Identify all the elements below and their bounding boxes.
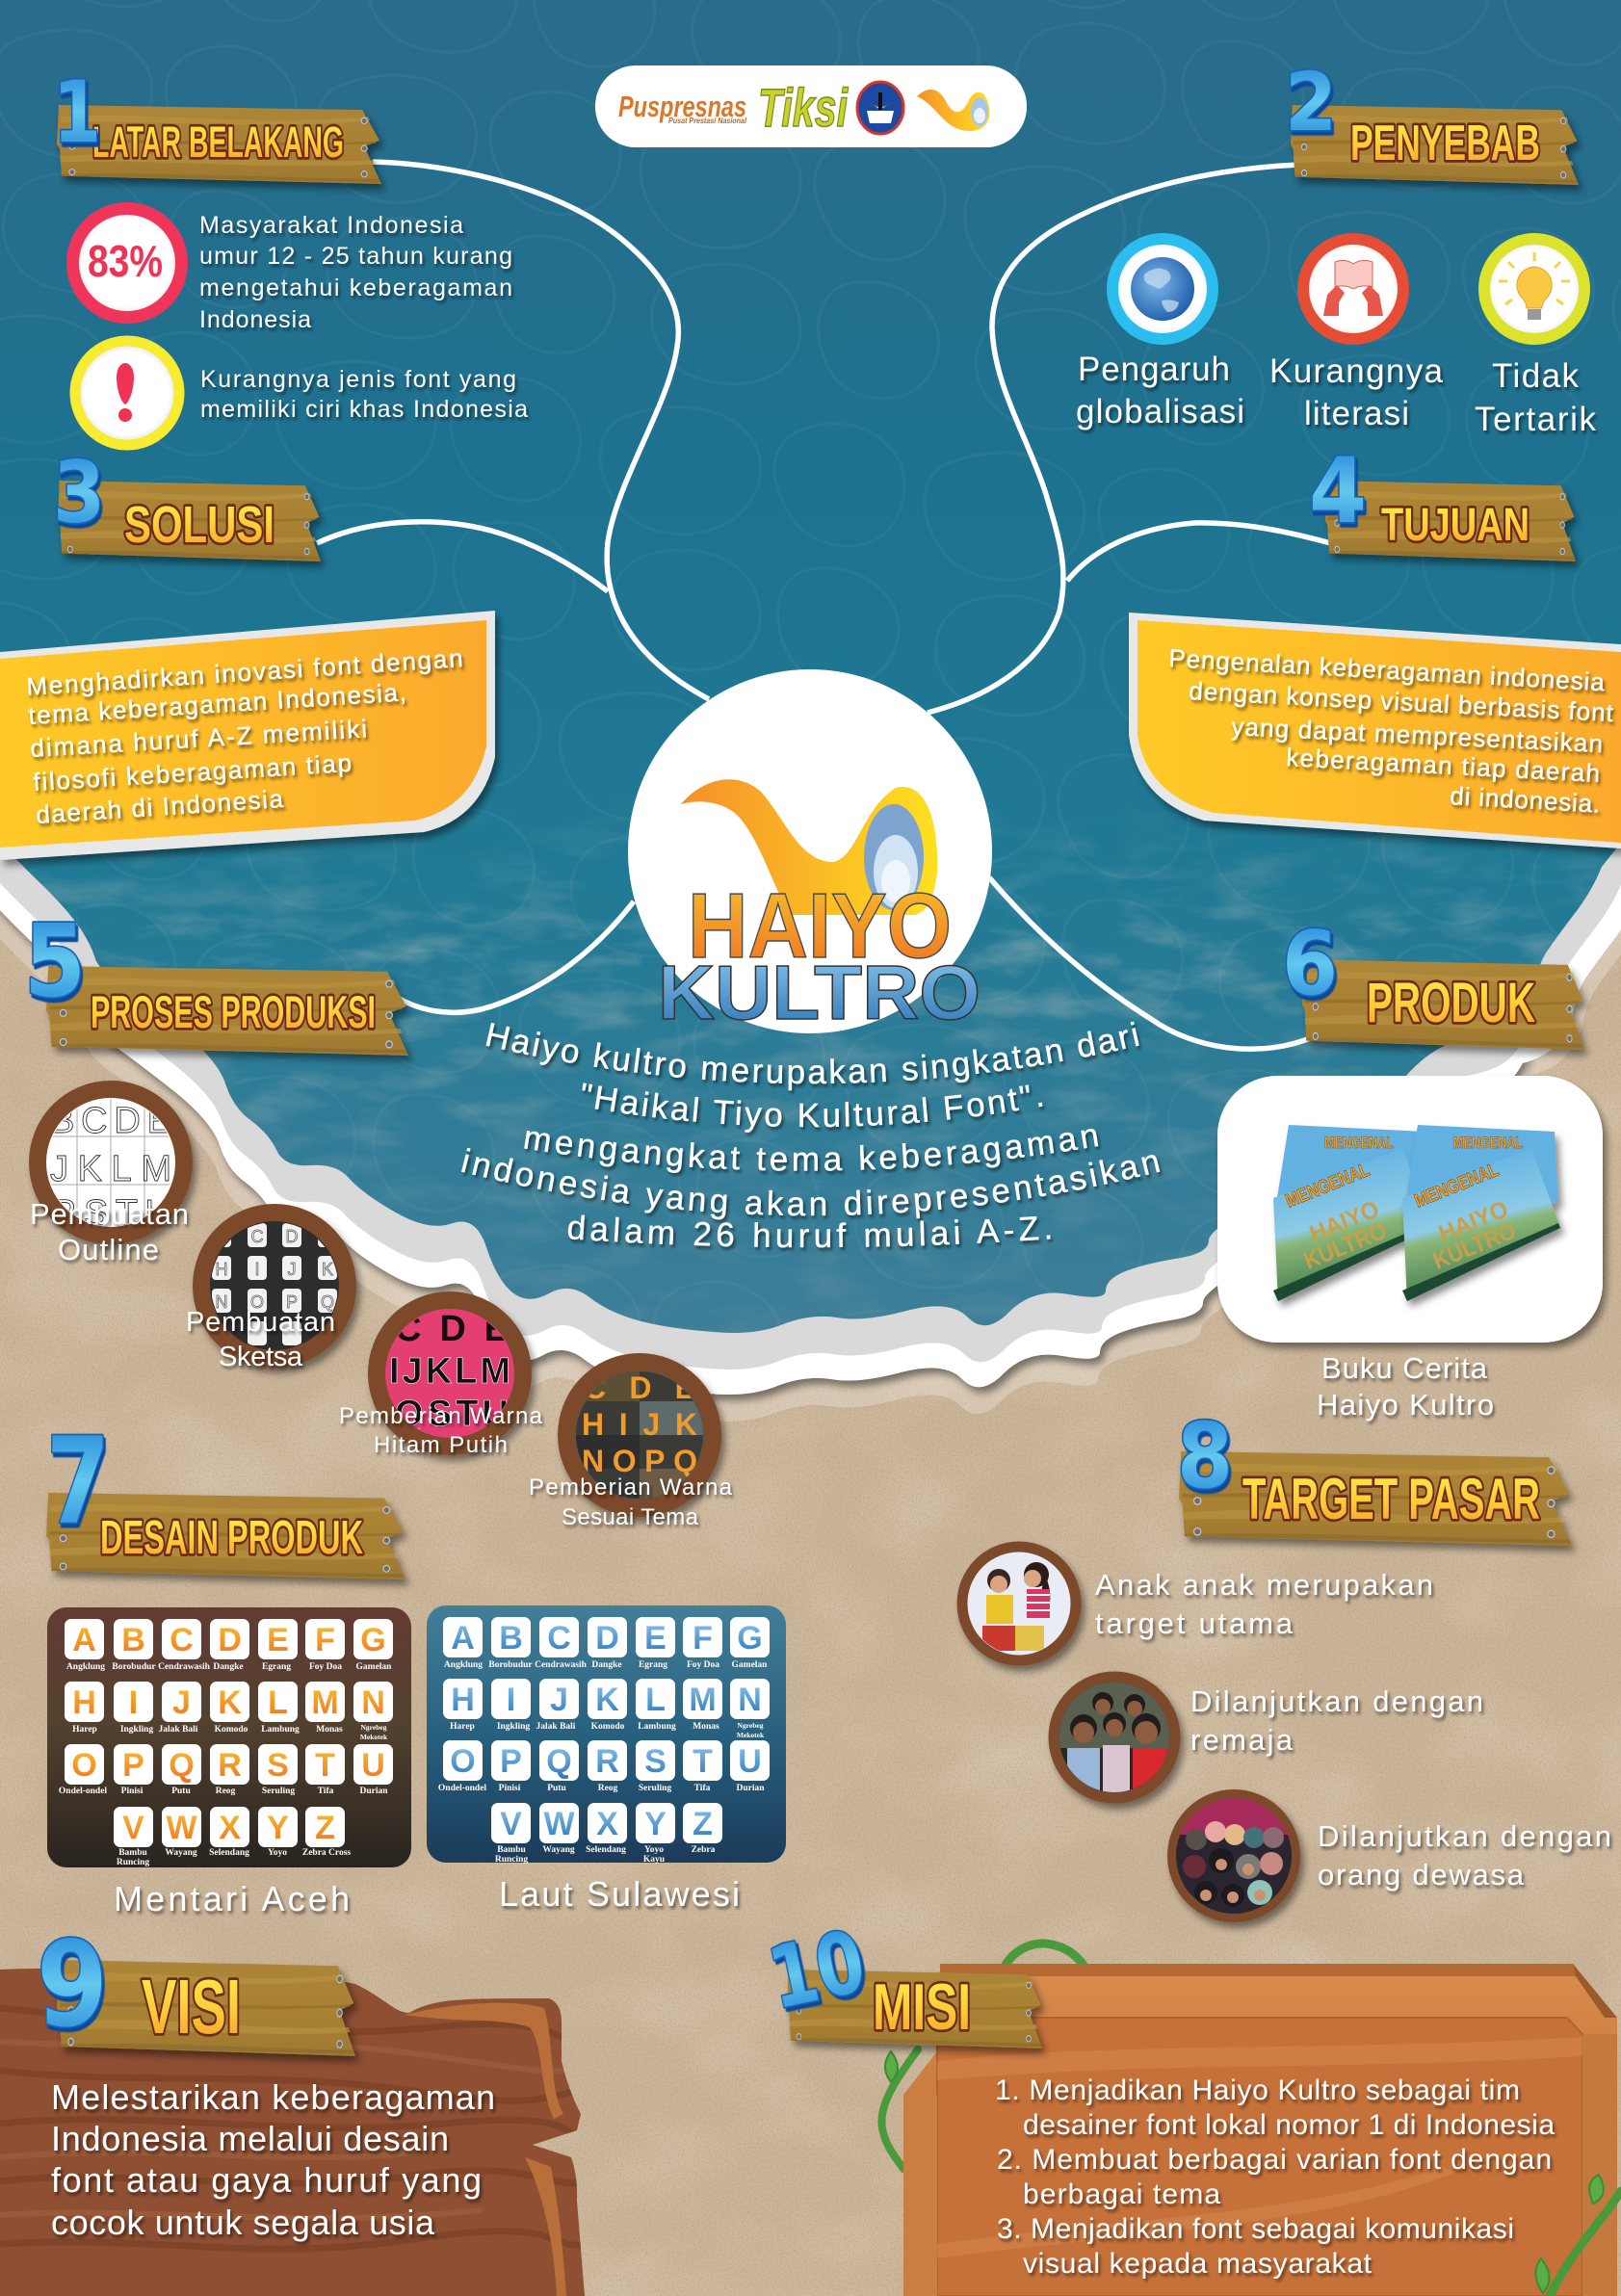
label bbox=[1095, 1568, 1433, 1640]
text: solusi: Menghadirkan inovasi font dengan bbox=[25, 643, 463, 701]
label bbox=[529, 1474, 733, 1530]
tiles: M bbox=[689, 1682, 717, 1718]
image: story book 1: MENGENAL bbox=[1283, 1160, 1373, 1213]
tiles: E bbox=[267, 1622, 289, 1658]
text: statistic: umur 12 - 25 tahun kurang bbox=[199, 243, 512, 270]
tile captions: Ngrebeg bbox=[738, 1721, 764, 1730]
image: story book 2: HAIYO bbox=[1435, 1196, 1512, 1248]
shoreline foam bands bbox=[0, 848, 1621, 1422]
text: font shortage bbox=[200, 366, 528, 423]
tiles: Q bbox=[169, 1747, 195, 1784]
tiles: N bbox=[361, 1684, 385, 1721]
image: sketch tiles: I bbox=[254, 1260, 260, 1279]
text: product caption: Buku Cerita bbox=[1321, 1351, 1488, 1385]
tile captions: Lambung bbox=[261, 1725, 300, 1735]
text: tujuan: dengan konsep visual berbasis font bbox=[1189, 676, 1614, 727]
panel: visi wooden board bbox=[0, 1968, 597, 2296]
image: photo letters: NOPQ bbox=[582, 1444, 697, 1478]
section 7: desain produk heading bbox=[46, 1413, 405, 1579]
section 10: misi heading: MISI bbox=[873, 1970, 971, 2044]
section 3: solusi heading: SOLUSI bbox=[124, 496, 275, 554]
section 6: produk heading bbox=[1282, 912, 1584, 1050]
logo: HAIYO wordmark: HAIYO bbox=[688, 874, 952, 978]
tiles: Z bbox=[693, 1806, 713, 1842]
logo: Puspresnas: Puspresnas bbox=[618, 90, 746, 123]
text: cause labels: Kurangnya bbox=[1269, 352, 1444, 390]
label bbox=[1190, 1684, 1483, 1757]
text: curved introduction paragraph bbox=[461, 1021, 1163, 1252]
text: curved introduction paragraph: indonesia yang akan direpresentasikan bbox=[461, 1148, 1163, 1225]
section 6: produk heading: 6 bbox=[1282, 912, 1338, 1015]
text: visi: font atau gaya huruf yang bbox=[51, 2160, 482, 2200]
tiles: R bbox=[595, 1743, 619, 1780]
icon: light bulb bbox=[1484, 239, 1584, 339]
text: cause labels: Tidak bbox=[1492, 357, 1580, 395]
image: outline letters bbox=[50, 1099, 170, 1226]
text: visi bbox=[51, 2077, 495, 2242]
image: photo letters: CDE bbox=[584, 1370, 695, 1405]
logo: KULTRO wordmark: KULTRO bbox=[658, 950, 980, 1035]
tile captions: Dangke bbox=[213, 1662, 244, 1672]
section 2: penyebab heading: PENYEBAB bbox=[1350, 116, 1540, 171]
text: solusi bbox=[25, 643, 463, 829]
tiles: R bbox=[218, 1747, 242, 1784]
tile captions: Ondel-ondel bbox=[438, 1784, 486, 1793]
tiles: S bbox=[267, 1747, 289, 1784]
tile captions: Tifa bbox=[318, 1787, 334, 1796]
text: curved introduction paragraph: "Haikal Tiyo Kultural Font". bbox=[582, 1083, 1046, 1137]
text: tujuan bbox=[1168, 643, 1614, 819]
image: black and white letters: QSTU bbox=[395, 1394, 509, 1434]
tile captions: Jalak Bali bbox=[536, 1722, 576, 1732]
text: visi: cocok untuk segala usia bbox=[51, 2203, 435, 2242]
text: misi list: 2. Membuat berbagai varian font dengan bbox=[997, 2144, 1552, 2176]
connector lines bbox=[317, 162, 1341, 1049]
tile captions: Yoyo bbox=[268, 1848, 287, 1858]
logo bar bbox=[595, 65, 1027, 147]
text: solusi: filosofi keberagaman tiap bbox=[33, 748, 353, 796]
image: story book 2 bbox=[1402, 1125, 1560, 1301]
label: Dilanjutkan dengan bbox=[1318, 1819, 1611, 1853]
tiles: H bbox=[72, 1684, 96, 1721]
tile captions: Putu bbox=[547, 1784, 566, 1793]
tile captions: Durian bbox=[736, 1784, 765, 1793]
tiles: M bbox=[311, 1684, 339, 1721]
image: sketch tiles: O bbox=[250, 1292, 264, 1312]
text: solusi: tema keberagaman Indonesia, bbox=[27, 677, 407, 730]
label: Pemberian Warna bbox=[339, 1403, 543, 1429]
section 4: tujuan heading bbox=[1309, 439, 1576, 561]
tile captions: Egrang bbox=[262, 1662, 291, 1672]
tiles: H bbox=[451, 1682, 475, 1718]
process step 2: sketch bbox=[186, 1213, 348, 1372]
text: alphabet captions: Mentari Aceh bbox=[114, 1879, 350, 1918]
text: statistic: Masyarakat Indonesia bbox=[199, 212, 463, 239]
label: Pemberian Warna bbox=[529, 1474, 733, 1500]
tile captions: Ingkling bbox=[120, 1725, 153, 1735]
section 1: latar belakang heading: LATAR BELAKANG bbox=[92, 117, 344, 167]
label bbox=[186, 1307, 335, 1372]
image: sketch tiles: Q bbox=[321, 1292, 334, 1312]
section 2: penyebab heading bbox=[1285, 55, 1579, 185]
tiles: F bbox=[693, 1620, 713, 1657]
text: statistic: Indonesia bbox=[199, 306, 311, 333]
tiles: T bbox=[315, 1747, 335, 1784]
text: statistic: mengetahui keberagaman bbox=[199, 274, 512, 301]
process step 1: outline bbox=[30, 1089, 189, 1266]
tile captions: Monas bbox=[316, 1725, 343, 1735]
image: story book 2: KULTRO bbox=[1429, 1217, 1520, 1275]
tile captions: Tifa bbox=[694, 1784, 711, 1793]
section 5: proses produksi heading: PROSES PRODUKSI bbox=[91, 986, 376, 1037]
background: water bbox=[0, 0, 1621, 1368]
text: tujuan: keberagaman tiap daerah bbox=[1286, 743, 1601, 788]
tile captions: Selendang bbox=[586, 1845, 626, 1855]
text: alphabet captions bbox=[114, 1874, 740, 1918]
image: sketch tiles: N bbox=[216, 1292, 227, 1312]
label: target utama bbox=[1095, 1606, 1294, 1640]
section 8: target pasar heading: 8 bbox=[1177, 1404, 1233, 1509]
tiles: U bbox=[738, 1743, 762, 1780]
tile captions: Cendrawasih bbox=[535, 1660, 588, 1670]
tile captions: Harep bbox=[72, 1725, 97, 1735]
tile captions: Gamelan bbox=[356, 1662, 392, 1672]
tiles: G bbox=[360, 1622, 386, 1658]
tiles: O bbox=[71, 1747, 97, 1784]
tile captions: Mekotek bbox=[360, 1733, 388, 1741]
text: product caption bbox=[1317, 1351, 1494, 1422]
image: story book 1: HAIYO bbox=[1306, 1196, 1383, 1248]
section 8: target pasar heading bbox=[1177, 1404, 1572, 1546]
image: story book 1: MENGENAL bbox=[1324, 1134, 1394, 1152]
section 4: tujuan heading: TUJUAN bbox=[1381, 500, 1529, 551]
image: outline letters: JKLM bbox=[50, 1149, 171, 1189]
tile captions: Ingkling bbox=[497, 1722, 530, 1732]
image: sketch tiles: K bbox=[322, 1260, 333, 1279]
tiles: G bbox=[737, 1620, 763, 1657]
tile captions: Zebra Cross bbox=[302, 1848, 351, 1858]
target audience 1: children bbox=[962, 1547, 1433, 1660]
tiles: X bbox=[219, 1810, 241, 1846]
tiles: F bbox=[315, 1622, 335, 1658]
tiles: P bbox=[122, 1747, 144, 1784]
image: story book 1: KULTRO bbox=[1300, 1217, 1391, 1275]
tile captions: Mekotek bbox=[737, 1731, 765, 1739]
tiles: J bbox=[550, 1682, 568, 1718]
label: Hitam Putih bbox=[374, 1432, 508, 1458]
tiles: K bbox=[595, 1682, 619, 1718]
tiles: X bbox=[596, 1806, 618, 1842]
logo: centre circle bbox=[628, 669, 992, 1035]
text: solusi: dimana huruf A-Z memiliki bbox=[30, 714, 368, 763]
tile captions: Seruling bbox=[639, 1784, 671, 1793]
tile captions: Runcing bbox=[495, 1855, 528, 1865]
tile captions: Kayu bbox=[643, 1855, 666, 1865]
text: misi list: visual kepada masyarakat bbox=[1023, 2248, 1373, 2280]
tile captions bbox=[59, 1662, 392, 1867]
label: Outline bbox=[58, 1233, 159, 1266]
section 7: desain produk heading: 7 bbox=[46, 1413, 110, 1552]
tiles: P bbox=[500, 1743, 522, 1780]
tile captions: Angklung bbox=[444, 1660, 483, 1670]
text: tujuan: di indonesia. bbox=[1450, 781, 1601, 819]
image: story book 2: MENGENAL bbox=[1453, 1134, 1523, 1152]
text: font shortage: memiliki ciri khas Indonesia bbox=[200, 396, 528, 423]
tile captions: Seruling bbox=[262, 1787, 295, 1796]
tiles: S bbox=[644, 1743, 667, 1780]
panel: Laut Sulawesi alphabet bbox=[427, 1605, 786, 1865]
label bbox=[1318, 1819, 1611, 1892]
image: sketch tiles: J bbox=[287, 1260, 297, 1279]
tiles: E bbox=[644, 1620, 667, 1657]
tiles bbox=[65, 1619, 393, 1847]
icon: green vines behind board bbox=[881, 1944, 1085, 2169]
tile captions: Foy Doa bbox=[687, 1660, 719, 1670]
section 3: solusi heading bbox=[53, 443, 321, 561]
text: misi list: berbagai tema bbox=[1023, 2179, 1220, 2210]
text: solusi: daerah di Indonesia bbox=[35, 784, 284, 829]
tile captions: Borobudur bbox=[112, 1662, 156, 1672]
label: remaja bbox=[1190, 1723, 1294, 1757]
label: Pembuatan bbox=[186, 1307, 335, 1338]
tiles: L bbox=[268, 1684, 288, 1721]
tile captions: Yoyo bbox=[644, 1845, 664, 1855]
image: black and white letters bbox=[391, 1316, 509, 1429]
tile captions: Lambung bbox=[638, 1722, 676, 1732]
section 9: visi heading: 9 bbox=[37, 1917, 108, 2053]
tile captions: Bambu bbox=[118, 1848, 147, 1858]
text: visi: Indonesia melalui desain bbox=[51, 2119, 449, 2158]
text: curved introduction paragraph: dalam 26 huruf mulai A-Z. bbox=[568, 1215, 1054, 1252]
text: cause labels bbox=[1076, 351, 1597, 438]
text: cause labels: globalisasi bbox=[1076, 393, 1244, 430]
tile captions: Komodo bbox=[215, 1725, 248, 1735]
tile captions: Jalak Bali bbox=[159, 1725, 198, 1735]
tiles: Z bbox=[315, 1810, 335, 1846]
image: teenagers photo bbox=[1059, 1683, 1169, 1793]
icon: exclamation bbox=[75, 341, 179, 445]
tiles: Y bbox=[267, 1810, 289, 1846]
label: Anak anak merupakan bbox=[1095, 1568, 1433, 1602]
tiles bbox=[443, 1617, 770, 1843]
image: sketch tiles: C bbox=[250, 1227, 264, 1246]
icon: green vine front bbox=[1535, 2175, 1621, 2296]
logo: horn bbox=[681, 779, 937, 915]
tiles: A bbox=[451, 1620, 475, 1657]
tile captions: Putu bbox=[171, 1787, 191, 1796]
image: black and white letters: IJKLM bbox=[389, 1351, 510, 1392]
image: photo letters bbox=[576, 1371, 703, 1499]
image: sketch tiles bbox=[212, 1223, 337, 1345]
tile captions: Borobudur bbox=[488, 1660, 533, 1670]
tile captions: Durian bbox=[359, 1787, 388, 1796]
tiles: W bbox=[166, 1810, 197, 1846]
text: cause labels: Tertarik bbox=[1475, 401, 1597, 438]
image: sketch tiles: H bbox=[216, 1260, 227, 1279]
tile captions: Ngrebeg bbox=[361, 1723, 387, 1732]
text: cause labels: literasi bbox=[1304, 395, 1409, 432]
tile captions: Harep bbox=[450, 1722, 475, 1732]
tiles: D bbox=[218, 1622, 242, 1658]
icon: globe bbox=[1112, 239, 1213, 339]
tile captions: Selendang bbox=[209, 1848, 249, 1858]
tiles: A bbox=[72, 1622, 96, 1658]
section 10: misi heading: 10 bbox=[760, 1912, 874, 2028]
tiles: Q bbox=[546, 1743, 572, 1780]
tiles: K bbox=[218, 1684, 242, 1721]
tiles: L bbox=[645, 1682, 666, 1718]
text: statistic bbox=[199, 212, 512, 333]
tiles: I bbox=[507, 1682, 515, 1718]
image: outline letters: RSTU bbox=[50, 1193, 171, 1234]
tiles: V bbox=[500, 1806, 522, 1842]
label bbox=[339, 1403, 543, 1458]
target audience 2: teenagers bbox=[1054, 1677, 1483, 1798]
text: misi list: 3. Menjadikan font sebagai komunikasi bbox=[997, 2213, 1514, 2245]
tile captions: Pinisi bbox=[499, 1784, 521, 1793]
tiles: J bbox=[172, 1684, 191, 1721]
image: outline letters: BCDE bbox=[50, 1101, 171, 1141]
label: Pembuatan bbox=[30, 1197, 189, 1231]
tiles: N bbox=[738, 1682, 762, 1718]
text: misi list: 1. Menjadikan Haiyo Kultro sebagai tim bbox=[995, 2074, 1520, 2106]
tile captions: Zebra bbox=[692, 1845, 716, 1855]
section 7: desain produk heading: DESAIN PRODUK bbox=[100, 1512, 363, 1564]
panel: solusi callout bbox=[0, 611, 495, 860]
text: visi: Melestarikan keberagaman bbox=[51, 2077, 495, 2117]
tile captions: Dangke bbox=[591, 1660, 622, 1670]
image: black and white letters: CDE bbox=[395, 1309, 509, 1349]
logo: emblem bbox=[857, 82, 903, 134]
panel: Mentari Aceh alphabet bbox=[47, 1607, 411, 1867]
logo: Tiksi: Tiksi bbox=[758, 77, 849, 138]
section 6: produk heading: PRODUK bbox=[1367, 972, 1535, 1034]
section 1: latar belakang heading bbox=[53, 63, 381, 184]
logo: Puspresnas: Pusat Prestasi Nasional bbox=[668, 117, 747, 125]
process step 4: themed colouring bbox=[529, 1362, 733, 1530]
tile captions: Wayang bbox=[542, 1845, 575, 1855]
label: Sesuai Tema bbox=[562, 1504, 699, 1530]
section 9: visi heading: VISI bbox=[142, 1964, 241, 2049]
tile captions bbox=[438, 1660, 768, 1865]
tile captions: Egrang bbox=[639, 1660, 667, 1670]
tiles: D bbox=[595, 1620, 619, 1657]
section 9: visi heading bbox=[37, 1917, 355, 2056]
tile captions: Bambu bbox=[497, 1845, 526, 1855]
tiles: B bbox=[121, 1622, 145, 1658]
image: children photo bbox=[982, 1562, 1050, 1651]
tile captions: Pinisi bbox=[121, 1787, 144, 1796]
logo: horn bbox=[917, 90, 989, 131]
image: photo letters: HIJK bbox=[582, 1407, 697, 1442]
text: tujuan: Pengenalan keberagaman indonesia bbox=[1168, 643, 1606, 696]
section 2: penyebab heading: 2 bbox=[1285, 55, 1337, 149]
panel: misi wooden board bbox=[903, 1964, 1617, 2296]
icon: open book bbox=[1303, 239, 1403, 339]
tile captions: Angklung bbox=[66, 1662, 105, 1672]
label bbox=[30, 1197, 189, 1266]
section 5: proses produksi heading bbox=[24, 902, 408, 1056]
text: alphabet captions: Laut Sulawesi bbox=[499, 1874, 740, 1914]
tiles: B bbox=[499, 1620, 523, 1657]
section 1 content bbox=[73, 208, 528, 445]
tile captions: Monas bbox=[693, 1722, 719, 1732]
tiles: C bbox=[547, 1620, 571, 1657]
tile captions: Cendrawasih bbox=[158, 1662, 211, 1672]
tile captions: Foy Doa bbox=[309, 1662, 342, 1672]
text: curved introduction paragraph: Haiyo kultro merupakan singkatan dari bbox=[485, 1021, 1142, 1095]
image: story book 2: MENGENAL bbox=[1412, 1160, 1502, 1213]
text: product caption: Haiyo Kultro bbox=[1317, 1388, 1494, 1422]
tiles: U bbox=[361, 1747, 385, 1784]
target audience 3: adults bbox=[1172, 1794, 1611, 1918]
icon: 83 percent bbox=[73, 208, 181, 318]
section 3: solusi heading: 3 bbox=[53, 443, 105, 542]
tile captions: Gamelan bbox=[732, 1660, 768, 1670]
tiles: W bbox=[543, 1806, 575, 1842]
label: Sketsa bbox=[219, 1342, 303, 1372]
label: Dilanjutkan dengan bbox=[1190, 1684, 1483, 1718]
image: sketch tiles: P bbox=[286, 1292, 298, 1312]
section 5: proses produksi heading: 5 bbox=[24, 902, 86, 1020]
text: misi list bbox=[995, 2074, 1555, 2280]
tile captions: Runcing bbox=[117, 1858, 149, 1867]
text: curved introduction paragraph: mengangkat tema keberagaman bbox=[524, 1129, 1102, 1178]
tiles: Y bbox=[644, 1806, 667, 1842]
tile captions: Reog bbox=[598, 1784, 618, 1793]
image: adults photo bbox=[1176, 1798, 1292, 1914]
text: font shortage: Kurangnya jenis font yang bbox=[200, 366, 516, 393]
tile captions: Ondel-ondel bbox=[59, 1787, 107, 1796]
tiles: T bbox=[693, 1743, 713, 1780]
panel: tujuan callout bbox=[1129, 613, 1621, 848]
text: tujuan: yang dapat mempresentasikan bbox=[1231, 712, 1604, 758]
tile captions: Komodo bbox=[591, 1722, 625, 1732]
icon: 83 percent: 83% bbox=[88, 236, 163, 286]
label: orang dewasa bbox=[1318, 1858, 1525, 1892]
section 1: latar belakang heading: 1 bbox=[53, 63, 101, 162]
tiles: V bbox=[122, 1810, 144, 1846]
panel: product books bbox=[1217, 1076, 1603, 1343]
text: misi list: desainer font lokal nomor 1 di Indonesia bbox=[1023, 2109, 1555, 2141]
tiles: O bbox=[450, 1743, 476, 1780]
section 4: tujuan heading: 4 bbox=[1309, 439, 1367, 544]
process step 3: black white colouring bbox=[339, 1300, 543, 1458]
section 2 content bbox=[1076, 239, 1597, 438]
image: story book 1 bbox=[1273, 1125, 1431, 1301]
tiles: C bbox=[170, 1622, 194, 1658]
image: sketch tiles: D bbox=[285, 1227, 299, 1246]
tile captions: Reog bbox=[216, 1787, 236, 1796]
text: cause labels: Pengaruh bbox=[1078, 351, 1230, 388]
tile captions: Wayang bbox=[165, 1848, 197, 1858]
tiles: I bbox=[129, 1684, 138, 1721]
section 10: misi heading bbox=[760, 1912, 1042, 2048]
